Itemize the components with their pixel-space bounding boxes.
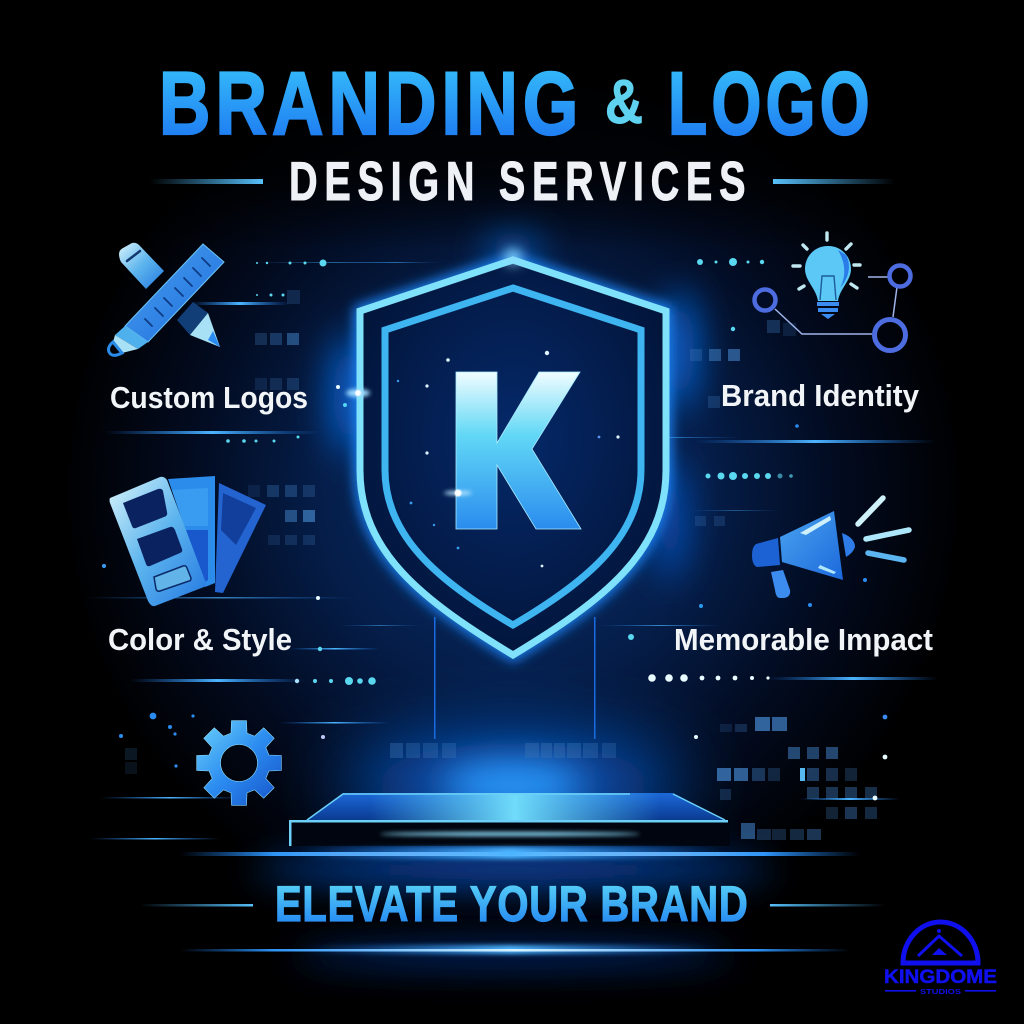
icon: light bulb network <box>754 233 910 350</box>
panel: brand identity <box>721 233 920 413</box>
subtitle: Design Services: DESIGN SERVICES <box>289 152 745 213</box>
icon: gear <box>197 721 281 805</box>
logo: Kingdome Studios: KINGDOME <box>884 966 997 988</box>
icon: ruler and pencil <box>108 243 224 355</box>
light streaks decoration <box>85 262 938 840</box>
platform pedestal <box>180 793 860 859</box>
label: Custom Logos: Custom Logos <box>110 380 308 415</box>
shield letter K <box>456 372 581 529</box>
label: Memorable Impact: Memorable Impact <box>674 622 933 657</box>
panel: color and style <box>108 476 292 657</box>
logo: Kingdome Studios: STUDIOS <box>920 989 961 996</box>
subtitle: Design Services <box>150 152 895 213</box>
bottom light bar <box>180 945 850 954</box>
dot trails decoration <box>102 258 887 800</box>
panel: memorable impact <box>674 498 933 657</box>
icon: megaphone <box>752 498 909 598</box>
title: Branding & Logo: & <box>605 68 643 137</box>
label: Brand Identity: Brand Identity <box>721 378 920 413</box>
panel: custom logos <box>108 243 308 415</box>
title: Branding & Logo: LOGO <box>668 55 870 154</box>
title: Branding & Logo: BRANDING <box>159 54 578 154</box>
logo: Kingdome Studios <box>884 922 997 996</box>
central shield emblem <box>346 249 666 655</box>
label: Color & Style: Color & Style <box>108 622 292 657</box>
data squares decoration <box>125 290 877 840</box>
icon: colour swatches <box>110 476 266 606</box>
title: Branding & Logo <box>159 54 870 154</box>
tagline: Elevate Your Brand: ELEVATE YOUR BRAND <box>275 876 748 932</box>
